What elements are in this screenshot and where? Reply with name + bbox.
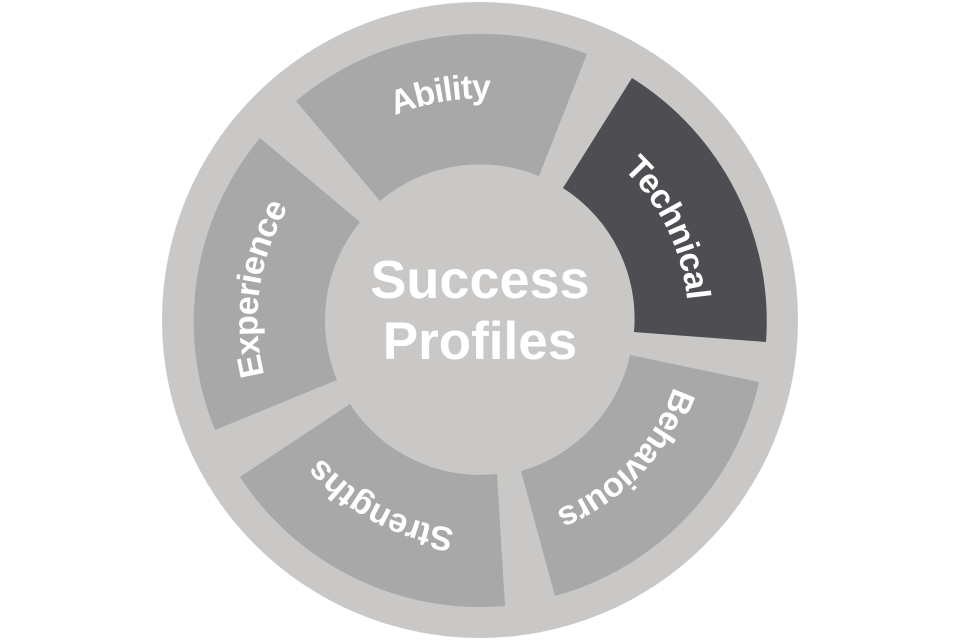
label: Experience: Experience bbox=[236, 202, 286, 378]
label: Strengths: Strengths bbox=[311, 460, 452, 550]
label: Technical: Technical bbox=[628, 153, 712, 298]
outer ring bbox=[162, 2, 798, 638]
segment: Behaviours bbox=[521, 355, 759, 596]
segment: Technical bbox=[563, 78, 767, 342]
label: Ability: Ability bbox=[396, 74, 491, 115]
label: Behaviours: Behaviours bbox=[558, 388, 695, 524]
centre title bbox=[370, 250, 590, 371]
segment: Ability bbox=[296, 34, 587, 201]
centre title: Success bbox=[370, 250, 590, 310]
segment: Experience bbox=[194, 138, 360, 430]
centre title: Profiles bbox=[383, 312, 577, 371]
segment: Strengths bbox=[240, 404, 505, 608]
